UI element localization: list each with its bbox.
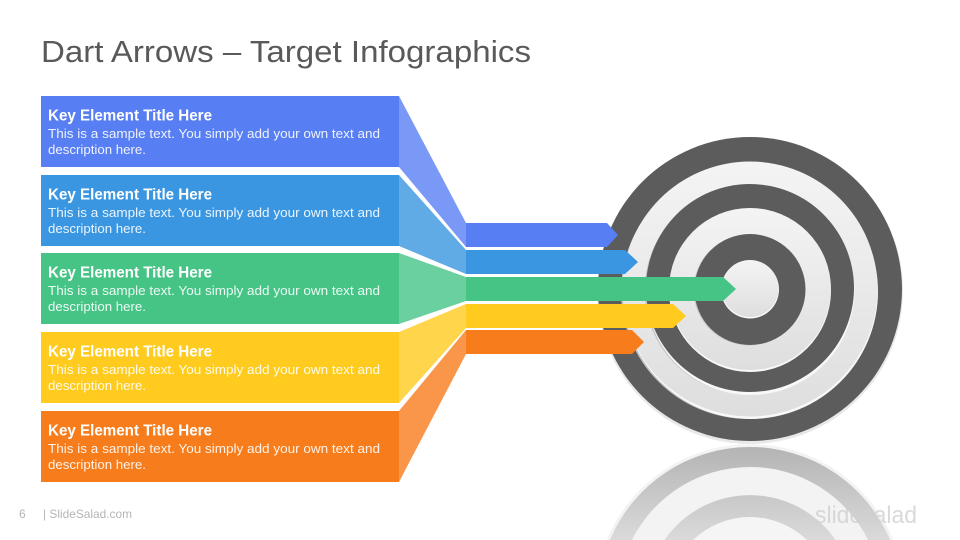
panel: element 4 <box>41 304 466 403</box>
arrow: orange <box>466 330 644 354</box>
arrow: green <box>466 277 736 301</box>
panel: element 5: This is a sample text. You simply add your own text and <box>48 442 380 456</box>
panel: element 3: Key Element Title Here <box>48 264 212 282</box>
panel: element 3: This is a sample text. You simply add your own text and <box>48 284 380 298</box>
panel: element 3 <box>41 253 466 324</box>
panel: element 1 <box>41 96 466 247</box>
panel: element 2: This is a sample text. You simply add your own text and <box>48 206 380 220</box>
panel: element 2: description here. <box>48 222 146 236</box>
panel: element 1: description here. <box>48 143 146 157</box>
panel: element 5: description here. <box>48 458 146 472</box>
panel: element 5 <box>41 330 466 482</box>
arrow: yellow <box>466 304 686 328</box>
arrow: blue <box>466 223 618 247</box>
footer source: | SlideSalad.com <box>43 507 132 521</box>
arrow: light blue <box>466 250 638 274</box>
panel: element 4: This is a sample text. You simply add your own text and <box>48 363 380 377</box>
panel: element 3: description here. <box>48 300 146 314</box>
logo watermark: slidesalad <box>815 502 917 529</box>
panel: element 2 <box>41 175 466 274</box>
title: Dart Arrows – Target Infographics <box>41 34 531 69</box>
panel: element 1: Key Element Title Here <box>48 108 212 124</box>
dartboard target <box>597 137 903 444</box>
panel: element 5: Key Element Title Here <box>48 422 212 440</box>
panel: element 1: This is a sample text. You simply add your own text and <box>48 127 380 141</box>
panel: element 4: description here. <box>48 379 146 393</box>
panel: element 4: Key Element Title Here <box>48 344 212 360</box>
page number: 6 <box>19 507 26 521</box>
target reflection <box>607 444 893 540</box>
panel: element 2: Key Element Title Here <box>48 186 212 204</box>
